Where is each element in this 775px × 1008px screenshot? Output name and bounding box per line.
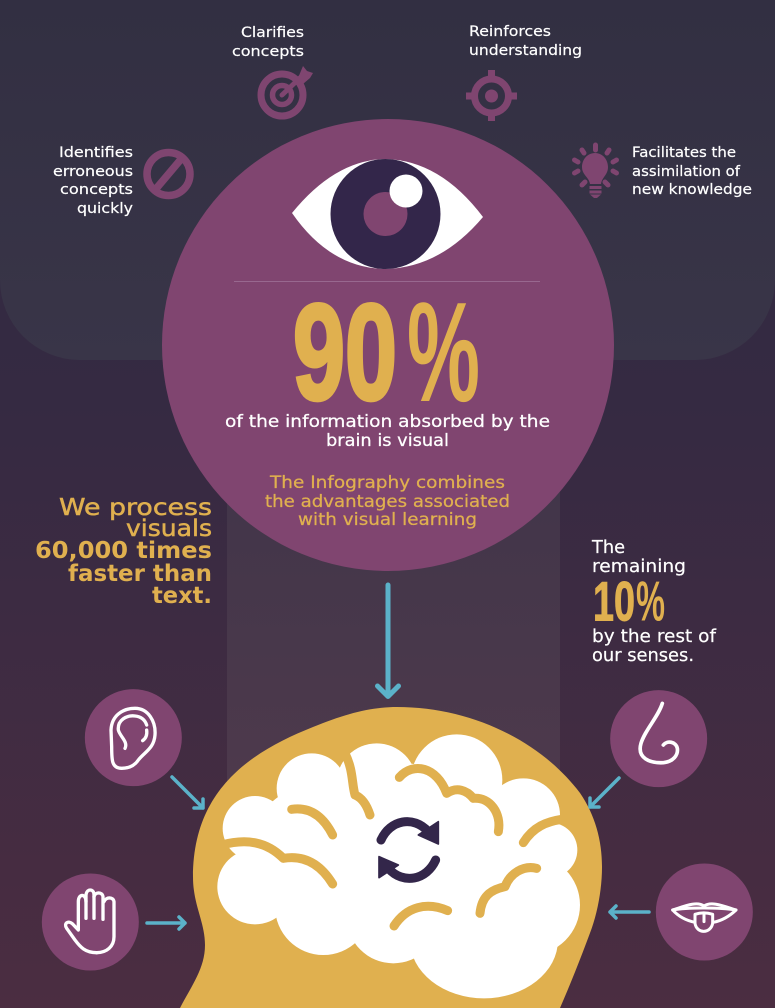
icon: mouth — [656, 863, 753, 960]
text: The remaining 10% by the rest of our senses: 10 — [593, 570, 635, 632]
text: The remaining 10% by the rest of our senses: our senses. — [592, 646, 694, 666]
icon: light bulb — [574, 145, 616, 198]
icon: target — [261, 66, 313, 116]
text: Facilitates the assimilation of new knowledge — [632, 145, 752, 198]
text: The Infography combines: The Infography combines — [269, 473, 505, 492]
text: of the information absorbed: brain is visual — [326, 431, 449, 450]
text: The Infography combines: the advantages associated — [265, 492, 510, 511]
text: The remaining 10% by the rest of our senses: by the rest of — [592, 627, 717, 647]
brain folds — [222, 753, 562, 926]
icon: crosshair — [466, 70, 517, 121]
stat: 90%: 90 — [293, 276, 397, 428]
text: Facilitates the assimilation of new knowledge: Facilitates the — [632, 145, 736, 161]
icon: eye — [292, 159, 483, 269]
text: Identifies erroneous concepts quickly: Identifies — [59, 145, 133, 161]
text: The remaining 10% by the rest of our senses: % — [636, 570, 665, 634]
text: Reinforces understanding: Reinforces — [469, 24, 551, 40]
text: We process visuals 60,000 times faster than text: faster than — [68, 561, 212, 587]
arrow: hand to brain — [147, 917, 185, 929]
head silhouette — [180, 707, 602, 1008]
text: We process visuals 60,000 times faster than text — [35, 495, 212, 609]
main purple circle — [162, 119, 614, 571]
text: The remaining 10% by the rest of our senses: remaining — [592, 557, 686, 577]
text: of the information absorbed: of the information absorbed by the — [225, 412, 550, 431]
text: Identifies erroneous concepts quickly: quickly — [77, 201, 133, 217]
text: Identifies erroneous concepts quickly — [53, 145, 133, 217]
text: Clarifies concepts: concepts — [232, 44, 304, 60]
text: Reinforces understanding — [469, 24, 582, 59]
stat: 90%: % — [407, 273, 480, 432]
text: Reinforces understanding: understanding — [469, 43, 582, 59]
text: Facilitates the assimilation of new knowledge: new knowledge — [632, 182, 752, 198]
text: We process visuals 60,000 times faster than text: 60,000 times — [35, 538, 212, 564]
text: The remaining 10% by the rest of our senses: The — [591, 538, 625, 558]
arrow: mouth to brain — [610, 906, 649, 918]
text: Clarifies concepts — [232, 25, 304, 60]
arrow: nose to brain — [590, 778, 619, 807]
brain — [217, 734, 580, 998]
text: We process visuals 60,000 times faster than text: visuals — [126, 516, 212, 542]
text: We process visuals 60,000 times faster than text: text. — [152, 583, 212, 609]
text: We process visuals 60,000 times faster than text: We process — [59, 495, 212, 521]
divider — [234, 281, 540, 282]
arrow: eye to brain — [378, 585, 398, 696]
icon: hand — [42, 873, 139, 970]
text: Facilitates the assimilation of new knowledge: assimilation of — [632, 164, 741, 180]
text: Identifies erroneous concepts quickly: concepts — [60, 182, 133, 198]
text: Clarifies concepts: Clarifies — [241, 25, 304, 41]
arrow: ear to brain — [172, 777, 203, 808]
panel: top benefits backdrop — [0, 0, 775, 360]
icon: sync arrows — [379, 822, 438, 878]
text: of the information absorbed — [225, 412, 550, 450]
icon: ear — [85, 689, 182, 786]
text: The Infography combines: with visual learning — [298, 510, 477, 529]
text: The Infography combines — [265, 473, 510, 529]
text: The remaining 10% by the rest of our senses — [591, 538, 717, 666]
icon: nose — [610, 690, 707, 787]
light column — [227, 360, 560, 820]
icon: prohibited — [147, 152, 190, 196]
text: Identifies erroneous concepts quickly: erroneous — [53, 164, 133, 180]
